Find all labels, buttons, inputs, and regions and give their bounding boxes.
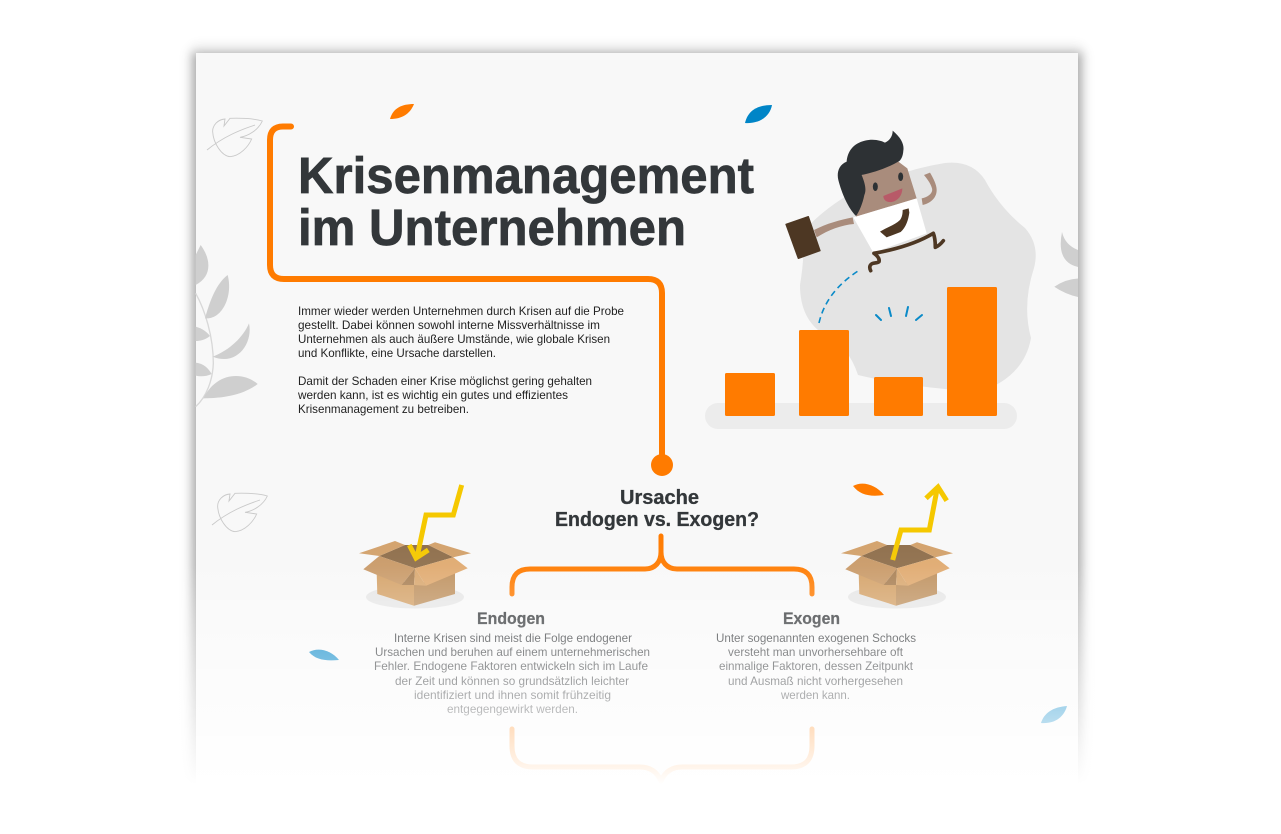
- intro text: [297, 304, 624, 416]
- background blob: [800, 163, 1036, 391]
- intro text: Unternehmen als auch äußere Umstände, wie globale Krisen: [298, 332, 610, 346]
- dashed jump arc: [819, 271, 858, 323]
- section heading: Ursache: [620, 487, 699, 509]
- title: [298, 147, 754, 256]
- intro text: und Konflikte, eine Ursache darstellen.: [298, 346, 496, 360]
- eyes: [873, 182, 878, 191]
- ear: [858, 188, 864, 194]
- bar chart: [725, 287, 997, 416]
- hair: [838, 131, 904, 216]
- arm right: [922, 173, 937, 205]
- icon: outlined leaf top: [207, 118, 262, 157]
- panel: background: [196, 53, 1078, 793]
- icon: right edge leaves: [1054, 232, 1078, 297]
- text: Endogen description: [374, 631, 650, 716]
- briefcase: [786, 217, 820, 258]
- intro text: werden kann, ist es wichtig ein gutes und effizientes: [297, 388, 568, 402]
- bracket top: [512, 536, 812, 594]
- icon: orange leaf top: [390, 104, 414, 119]
- icon: box endogen: [359, 541, 471, 608]
- heading: Endogen: Endogen: [477, 610, 545, 628]
- connector line from title to section: [270, 126, 673, 476]
- intro text: Krisenmanagement zu betreiben.: [298, 402, 469, 416]
- shirt: [853, 198, 927, 253]
- icon: left branch with leaves: [196, 245, 258, 407]
- arrow: exogen leaving box: [893, 487, 947, 560]
- intro text: gestellt. Dabei können sowohl interne Missverhältnisse im: [298, 318, 600, 332]
- text: Endogen description: Interne Krisen sind meist die Folge endogener: [394, 631, 632, 645]
- title: Krisenmanagement: [298, 147, 754, 204]
- impact ticks: [876, 307, 922, 320]
- bracket bottom: [512, 729, 812, 781]
- ground: [705, 403, 1017, 429]
- legs: [870, 233, 943, 271]
- heading: Exogen: Exogen: [783, 610, 840, 628]
- arrow: endogen pointing into box: [409, 485, 462, 558]
- text: Exogen description: Unter sogenannten exogenen Schocks: [716, 631, 916, 645]
- intro text: Damit der Schaden einer Krise möglichst gering gehalten: [298, 374, 592, 388]
- text: Exogen description: [716, 631, 916, 702]
- text: Exogen description: einmalige Faktoren, dessen Zeitpunkt: [719, 659, 914, 673]
- text: Endogen description: entgegengewirkt werden.: [447, 702, 578, 716]
- mouth: [883, 188, 902, 202]
- icon: blue leaf top: [745, 105, 772, 123]
- icon: blue leaf left: [309, 650, 339, 660]
- icon: orange leaf right: [853, 484, 884, 496]
- text: Exogen description: und Ausmaß nicht vorhergesehen: [728, 674, 903, 688]
- icon: outlined leaf lower: [212, 493, 267, 532]
- businessman figure: [786, 131, 943, 271]
- tie: [880, 208, 909, 237]
- icon: blue leaf right: [1041, 706, 1067, 723]
- section heading: Endogen vs. Exogen?: [555, 509, 759, 531]
- text: Endogen description: Fehler. Endogene Faktoren entwickeln sich im Laufe: [374, 659, 648, 673]
- text: Endogen description: identifiziert und ihnen somit frühzeitig: [414, 688, 611, 702]
- white fade overlay: [0, 530, 1281, 834]
- arm left: [814, 217, 854, 237]
- face: [856, 162, 917, 217]
- text: Endogen description: Ursachen und beruhen auf einem unternehmerischen: [375, 645, 650, 659]
- section heading: [555, 487, 759, 531]
- text: Endogen description: der Zeit und können so grundsätzlich leichter: [395, 674, 629, 688]
- intro text: Immer wieder werden Unternehmen durch Krisen auf die Probe: [298, 304, 624, 318]
- icon: box exogen: [841, 541, 953, 608]
- panel shadow: [187, 44, 1087, 786]
- text: Exogen description: versteht man unvorhersehbare oft: [728, 645, 904, 659]
- text: Exogen description: werden kann.: [780, 688, 850, 702]
- illustration: businessman jumping over bar chart: [705, 131, 1036, 429]
- title: im Unternehmen: [298, 199, 686, 256]
